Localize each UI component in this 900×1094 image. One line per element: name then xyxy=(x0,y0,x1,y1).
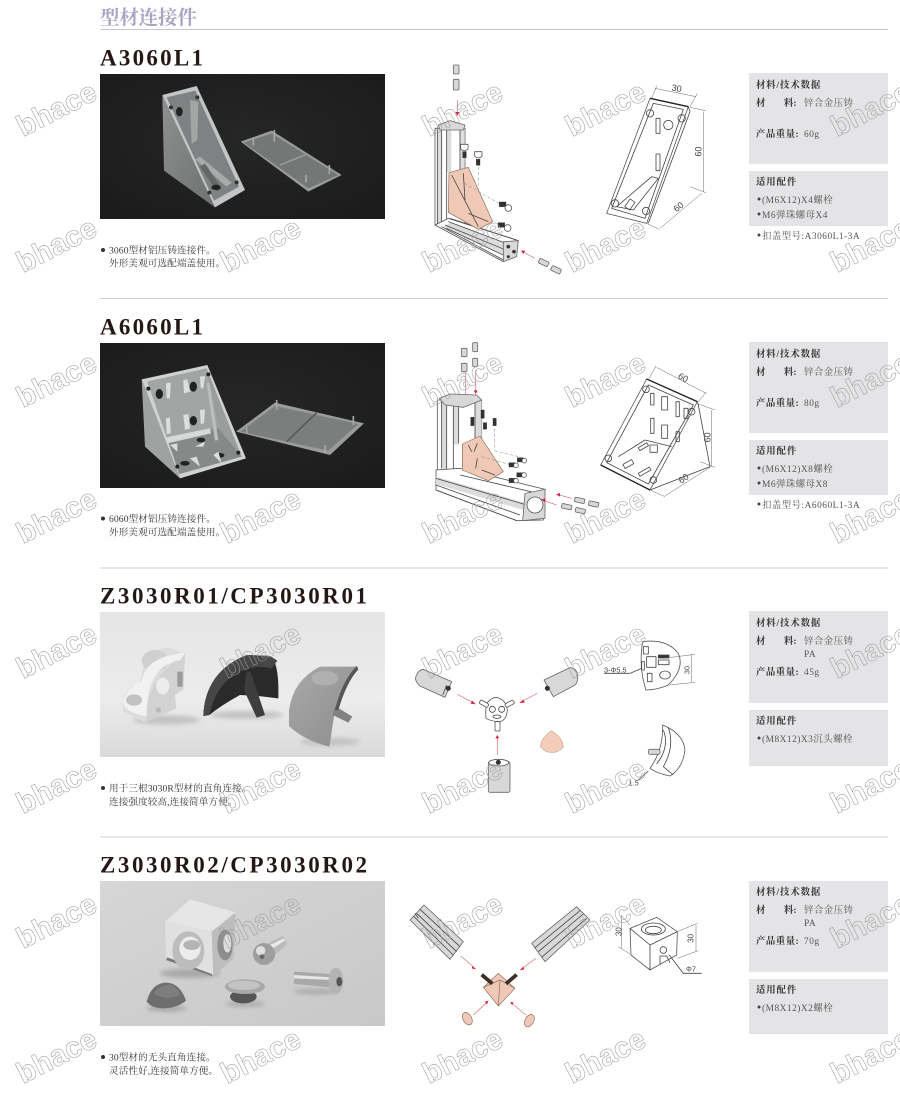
spec panel: material data: 产品重量: xyxy=(756,128,799,140)
heading: A6060L1: A6060L1 xyxy=(100,314,203,340)
product photo: Z3030R02 cube, bolts and caps xyxy=(100,881,385,1026)
spec panel: material data: 70g xyxy=(804,937,820,947)
product photo: A3060L1 bracket and cap xyxy=(100,74,385,219)
heading: Z3030R02/CP3030R02: Z3030R02/CP3030R02 xyxy=(100,852,367,878)
section: Z3030R02/CP3030R02 xyxy=(100,852,888,1077)
cap model note: 扣盖型号:A6060L1-3A xyxy=(762,499,860,511)
section: A3060L1 xyxy=(100,46,888,274)
section: A6060L1 xyxy=(100,314,888,538)
heading: A3060L1: A3060L1 xyxy=(100,46,203,70)
spec panel: material data: 锌合金压铸 xyxy=(804,904,854,916)
watermarks: bhace xyxy=(11,211,102,279)
watermarks: bhace xyxy=(417,752,508,820)
spec panel: material data: 料: xyxy=(784,904,796,916)
description text xyxy=(101,244,225,270)
watermarks: bhace xyxy=(417,75,508,143)
product photo: Z3030R01 corner and caps xyxy=(100,612,385,757)
section: Z3030R01/CP3030R01 xyxy=(100,584,888,808)
spec panel: material data: 材料/技术数据 xyxy=(756,79,821,91)
spec panel: material data: 材 xyxy=(756,366,766,378)
spec panel: material data: 材 xyxy=(756,904,766,916)
dimension drawing: A3060L1 xyxy=(607,83,706,229)
spec panel: material data: 料: xyxy=(784,635,796,647)
watermarks: bhace xyxy=(560,346,651,414)
watermarks: bhace xyxy=(215,617,306,685)
spec panel: material data xyxy=(749,881,888,972)
spec panel: material data: 80g xyxy=(804,399,820,409)
watermarks: bhace xyxy=(11,887,102,955)
dimension drawing: A6060L1 xyxy=(601,366,715,497)
dimension drawing: A6060L1: 60 xyxy=(677,472,690,486)
watermarks: bhace xyxy=(417,482,508,550)
description text: 3060型材铝压铸连接件。 xyxy=(109,244,216,256)
watermarks: bhace xyxy=(417,211,508,279)
assembly diagram: A3060L1 xyxy=(435,65,562,274)
watermarks: bhace xyxy=(11,1022,102,1090)
spec panel: material data: 材 xyxy=(756,635,766,647)
spec panel: accessories: (M6X12)X8螺栓 xyxy=(762,463,833,475)
dimension drawing: Z3030R01: 30 xyxy=(683,666,692,674)
spec panel: material data: 材料/技术数据 xyxy=(756,348,821,360)
spec panel: material data: 料: xyxy=(784,97,796,109)
spec panel: material data: 45g xyxy=(804,668,820,678)
dimension drawing: A3060L1: 30 xyxy=(671,83,682,94)
watermarks: bhace xyxy=(560,211,651,279)
watermarks: bhace xyxy=(215,887,306,955)
description text: 用于三根3030R型材的直角连接。 xyxy=(109,782,251,794)
dimension drawing: Z3030R02 xyxy=(615,915,702,974)
spec panel: material data: 料: xyxy=(784,366,796,378)
watermarks: bhace xyxy=(215,752,306,820)
watermarks: bhace xyxy=(417,887,508,955)
watermarks: bhace xyxy=(560,482,651,550)
watermarks: bhace xyxy=(11,752,102,820)
spec panel: accessories xyxy=(749,710,888,766)
spec panel: accessories: (M8X12)X3沉头螺栓 xyxy=(762,733,853,745)
description text: 连接强度较高,连接简单方便。 xyxy=(109,796,238,808)
spec panel: material data: 产品重量: xyxy=(756,935,799,947)
spec panel: material data: 产品重量: xyxy=(756,397,799,409)
description text xyxy=(101,782,251,808)
spec panel: accessories: 适用配件 xyxy=(756,715,797,727)
spec panel: accessories: M6弹珠螺母X8 xyxy=(762,478,828,490)
spec panel: material data: 材料/技术数据 xyxy=(756,886,821,898)
description text: 外形美观可选配端盖使用。 xyxy=(109,258,225,270)
spec panel: material data: 产品重量: xyxy=(756,666,799,678)
spec panel: accessories: (M6X12)X4螺栓 xyxy=(762,194,833,206)
spec panel: material data: 材料/技术数据 xyxy=(756,617,821,629)
watermarks: bhace xyxy=(417,617,508,685)
watermarks: bhace xyxy=(417,346,508,414)
description text xyxy=(101,513,225,538)
description text: 外形美观可选配端盖使用。 xyxy=(109,526,225,538)
dimension drawing: A6060L1: 60 xyxy=(676,371,690,384)
spec panel: material data: PA xyxy=(804,650,816,660)
assembly diagram: A6060L1 xyxy=(436,343,599,521)
dimension drawing: Z3030R01: 3-Φ5.5 xyxy=(604,666,627,675)
watermarks: bhace xyxy=(215,482,306,550)
dimension drawing: Z3030R02: 30 xyxy=(615,927,624,936)
spec panel: accessories xyxy=(749,440,888,495)
spec panel: accessories: 适用配件 xyxy=(756,984,797,996)
spec panel: material data: 60g xyxy=(804,130,820,140)
watermarks: bhace xyxy=(560,1022,651,1090)
spec panel: material data: 锌合金压铸 xyxy=(804,366,854,378)
spec panel: accessories: 适用配件 xyxy=(756,176,797,188)
watermarks: bhace xyxy=(215,1022,306,1090)
product photo: A6060L1 bracket and cap xyxy=(100,343,385,488)
spec panel: material data: PA xyxy=(804,919,816,929)
watermarks: bhace xyxy=(417,1022,508,1090)
watermarks: bhace xyxy=(560,887,651,955)
spec panel: accessories xyxy=(749,171,888,226)
dimension drawing: A3060L1: 60 xyxy=(672,200,686,214)
dimension drawing: A3060L1: 60 xyxy=(694,147,704,157)
spec panel: material data: 锌合金压铸 xyxy=(804,635,854,647)
spec panel: material data xyxy=(749,342,888,433)
spec panel: material data xyxy=(749,611,888,703)
watermarks: bhace xyxy=(11,482,102,550)
description text: 灵活性好,连接简单方便。 xyxy=(109,1065,218,1077)
spec panel: material data xyxy=(749,73,888,164)
spec panel: accessories xyxy=(749,979,888,1034)
assembly diagram: Z3030R02 xyxy=(410,905,590,1029)
spec panel: accessories: 适用配件 xyxy=(756,445,797,457)
assembly diagram: Z3030R01 xyxy=(416,668,578,792)
dimension drawing: Z3030R01: 1.5 xyxy=(629,779,639,788)
heading: Z3030R01/CP3030R01: Z3030R01/CP3030R01 xyxy=(100,584,367,608)
dimension drawing: A6060L1: 60 xyxy=(703,432,713,442)
spec panel: material data: 锌合金压铸 xyxy=(804,97,854,109)
watermarks: bhace xyxy=(11,617,102,685)
spec panel: material data: 材 xyxy=(756,97,766,109)
dimension drawing: Z3030R02: 30 xyxy=(686,933,695,943)
watermarks: bhace xyxy=(560,75,651,143)
watermarks: bhace xyxy=(11,346,102,414)
description text: 30型材的无头直角连接。 xyxy=(109,1052,216,1064)
watermarks: bhace xyxy=(11,75,102,143)
cap model note: 扣盖型号:A3060L1-3A xyxy=(762,230,860,242)
page title: 型材连接件 xyxy=(100,7,198,29)
spec panel: accessories: (M8X12)X2螺栓 xyxy=(762,1002,833,1014)
dimension drawing: Z3030R02: Φ7 xyxy=(686,965,696,974)
dimension drawing: Z3030R01 xyxy=(604,641,695,788)
description text: 6060型材铝压铸连接件。 xyxy=(109,513,216,525)
spec panel: accessories: M6弹珠螺母X4 xyxy=(762,209,828,221)
watermarks: bhace xyxy=(560,752,651,820)
watermarks: bhace xyxy=(215,211,306,279)
watermarks: bhace xyxy=(560,617,651,685)
description text xyxy=(101,1052,218,1077)
